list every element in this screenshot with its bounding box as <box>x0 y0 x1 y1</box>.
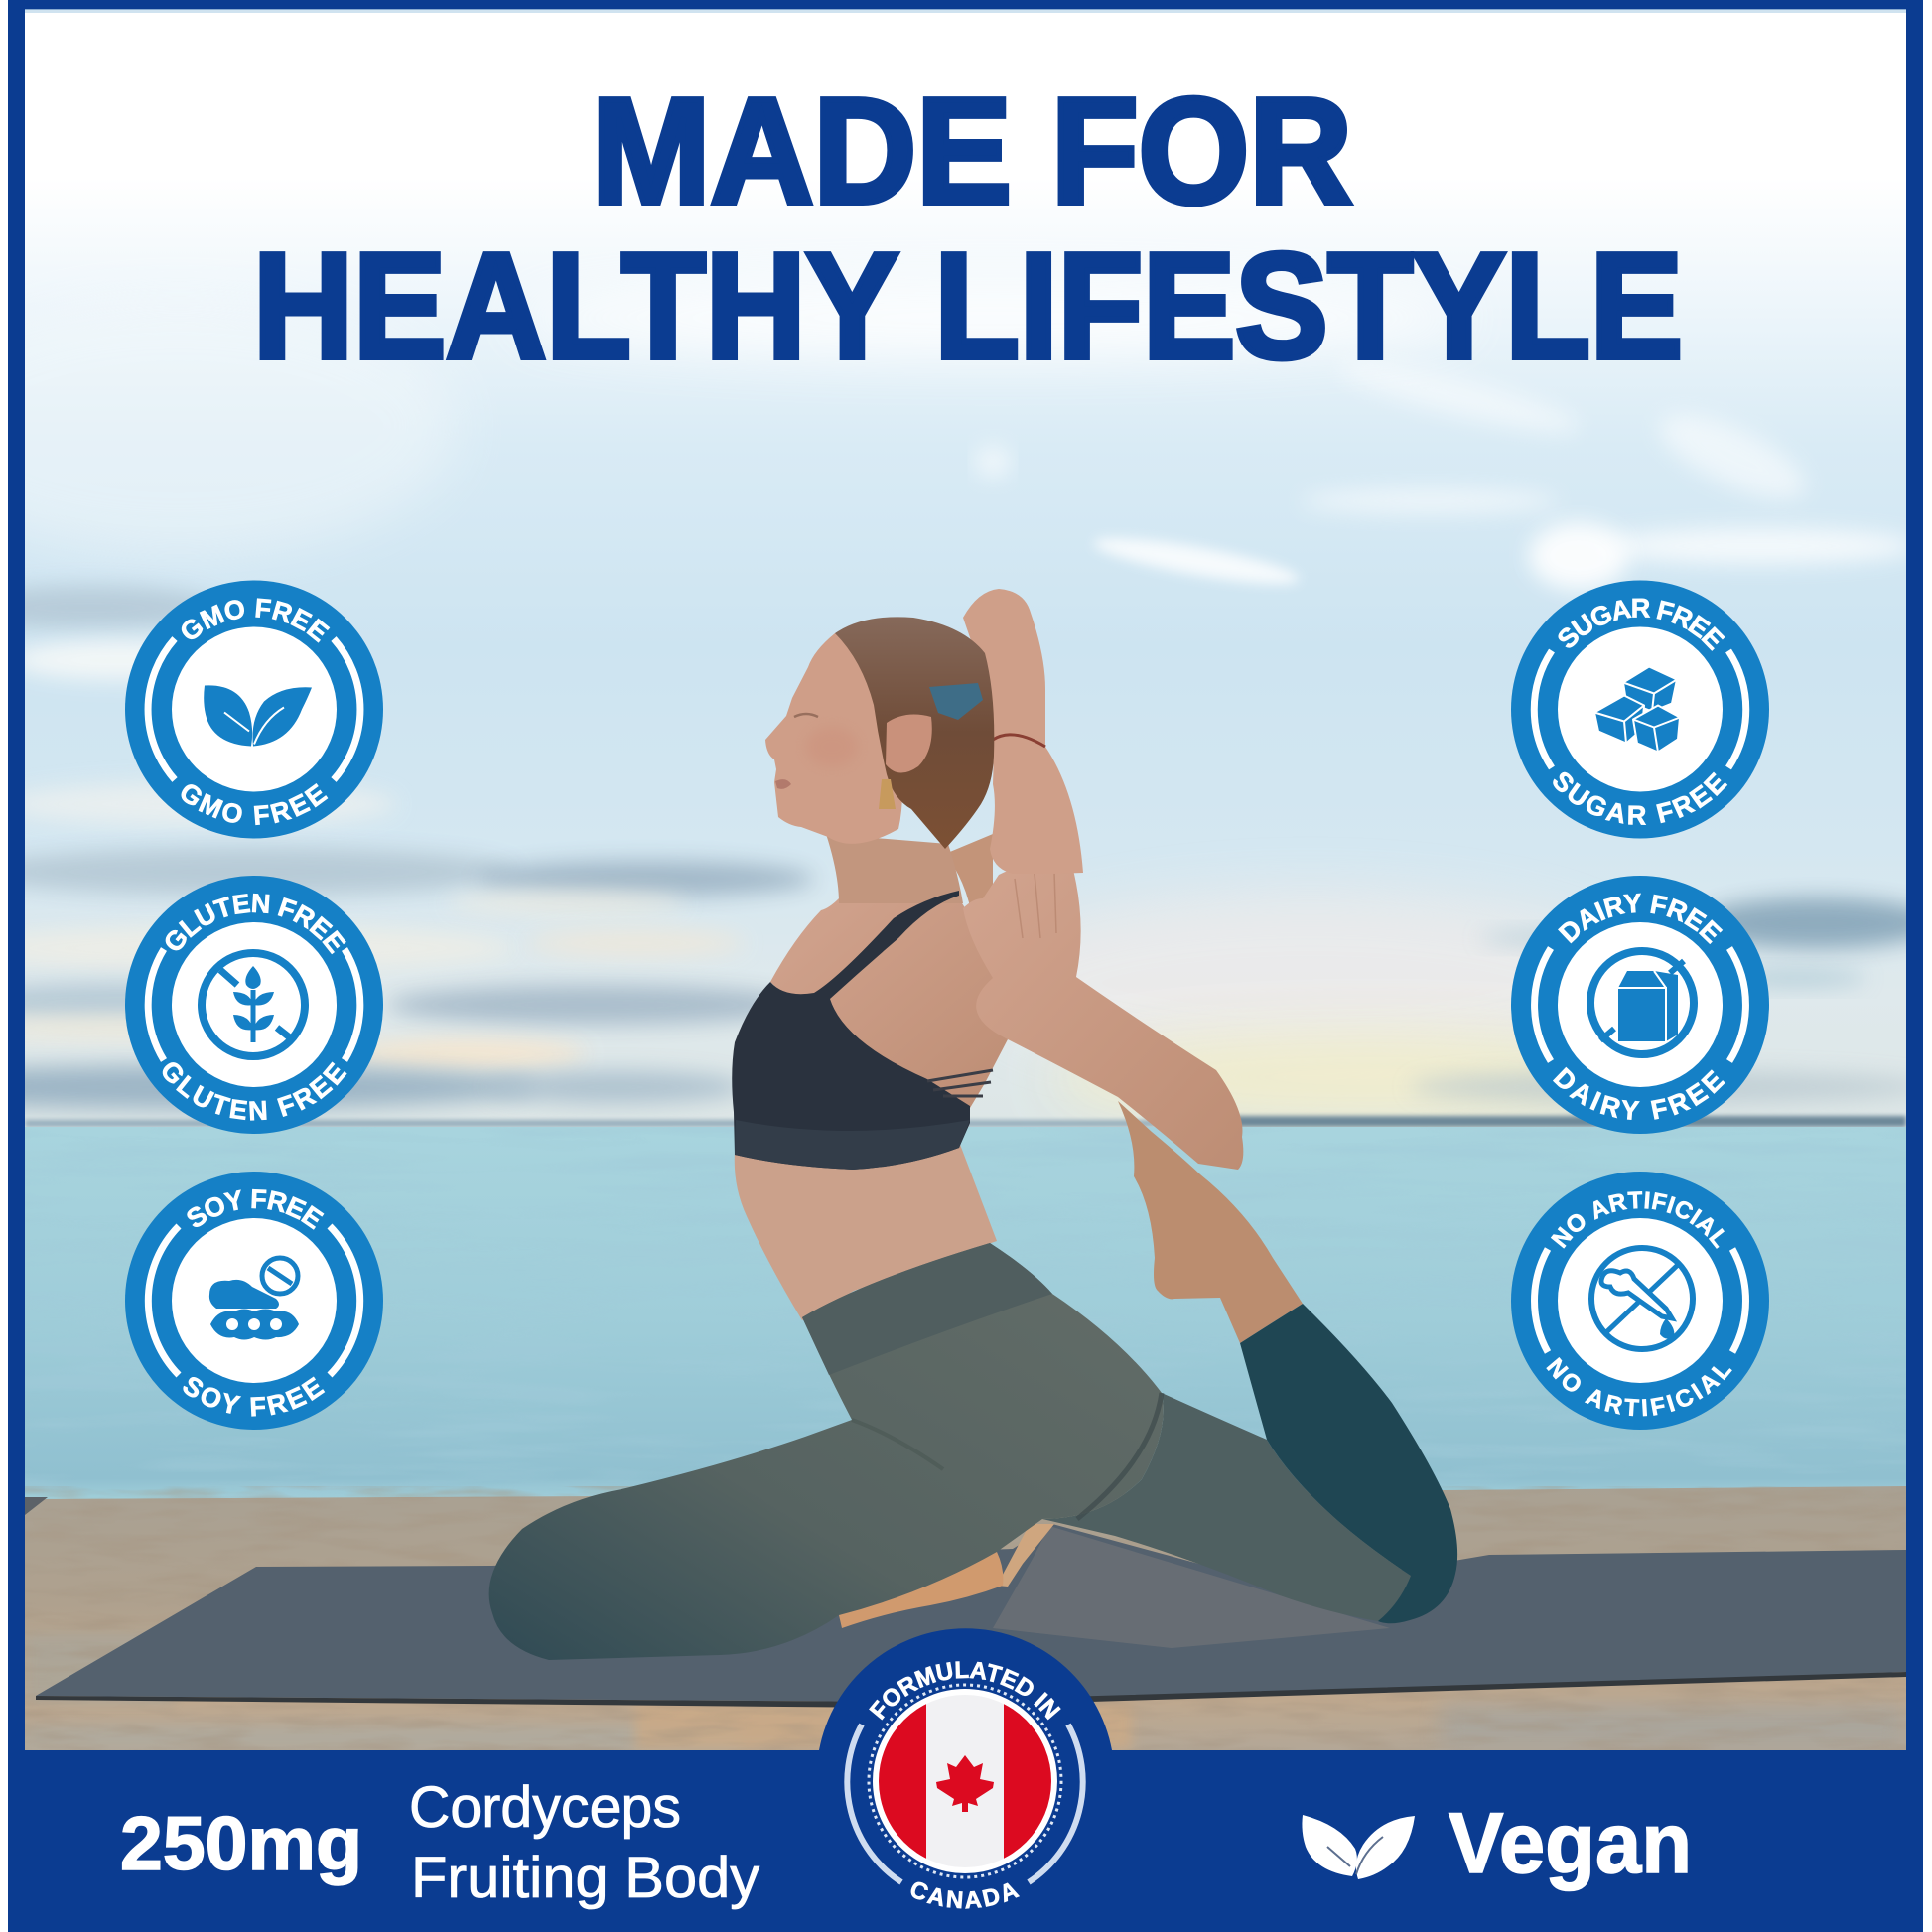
badge: no artificial: NO ARTIFICIAL <box>1546 1357 1732 1416</box>
badge: soy free: SOY FREE <box>183 1376 326 1417</box>
badge: dairy free: DAIRY FREE <box>1558 894 1724 945</box>
yoga mat <box>36 1524 1906 1702</box>
hair clip <box>929 683 983 720</box>
icon: Canadian flag <box>874 1688 1056 1876</box>
text: Cordyceps Fruiting Body: Cordyceps <box>409 1775 681 1840</box>
badge: sugar free: SUGAR FREE <box>1558 598 1725 651</box>
front foot <box>839 1552 1003 1628</box>
text: Cordyceps Fruiting Body <box>409 1775 759 1910</box>
text: Cordyceps Fruiting Body: Fruiting Body <box>411 1846 759 1910</box>
badge: dairy free <box>1511 876 1769 1134</box>
rear arm behind head <box>951 834 993 903</box>
badge: soy free: SOY FREE <box>187 1189 324 1230</box>
badge: formulated in Canada: FORMULATED IN <box>869 1661 1061 1720</box>
sand between legs <box>997 1524 1054 1587</box>
neck <box>826 834 963 903</box>
thigh fold <box>852 1420 943 1469</box>
icon: vegan leaves <box>1302 1815 1415 1879</box>
icon: wheat crossed out <box>202 953 305 1056</box>
stone ground <box>25 1486 1906 1750</box>
badge: gluten free: GLUTEN FREE <box>165 894 346 955</box>
leggings dark calf <box>1240 1304 1457 1623</box>
leggings rear thigh <box>1042 1393 1411 1621</box>
badge: no artificial: NO ARTIFICIAL <box>1551 1191 1725 1249</box>
back foot leg <box>1118 1101 1303 1343</box>
badge: sugar free <box>1511 580 1769 838</box>
bra back strings <box>927 1070 993 1096</box>
sky <box>25 10 1906 1127</box>
badge: gluten free: GLUTEN FREE <box>163 1062 347 1121</box>
stat: 250mg: 250mg <box>120 1802 362 1886</box>
ear <box>886 715 932 773</box>
icon: leaves <box>204 685 312 747</box>
icon: sugar cubes <box>1594 667 1680 753</box>
top edge band <box>25 9 1906 13</box>
badge: gluten free <box>125 876 383 1134</box>
text: Vegan: Vegan <box>1449 1796 1692 1891</box>
torso <box>735 1142 997 1320</box>
bracelet <box>993 735 1045 747</box>
icon: dropper crossed out <box>1591 1248 1693 1349</box>
title: MADE FOR <box>592 67 1352 234</box>
badge: formulated in Canada <box>819 1628 1112 1914</box>
leggings front thigh and hip <box>489 1243 1164 1660</box>
title <box>253 67 1683 389</box>
raised arm <box>963 589 1083 874</box>
back and chest skin <box>770 898 1008 1108</box>
badge: GMO free <box>125 580 383 838</box>
waistband shade <box>802 1243 1052 1375</box>
badge: GMO free: GMO FREE <box>181 783 328 826</box>
woman figure <box>489 589 1457 1660</box>
icon: soybean pods <box>209 1258 299 1340</box>
bra band <box>735 1120 970 1170</box>
bottom bar <box>9 1750 1923 1932</box>
face <box>765 633 902 844</box>
badge: sugar free: SUGAR FREE <box>1553 772 1727 825</box>
forearm and raised hand <box>963 865 1243 1170</box>
title: HEALTHY LIFESTYLE <box>253 221 1683 389</box>
badge: GMO free: GMO FREE <box>181 598 330 643</box>
hair <box>835 617 994 849</box>
facial features <box>775 713 818 789</box>
icon: milk carton crossed out <box>1590 951 1694 1054</box>
badge: formulated in Canada: CANADA <box>911 1882 1020 1909</box>
badge: dairy free: DAIRY FREE <box>1553 1066 1725 1120</box>
badge: no artificial <box>1511 1172 1769 1430</box>
sports bra <box>732 891 970 1170</box>
badge: soy free <box>125 1172 383 1430</box>
finger lines <box>1015 872 1056 938</box>
sea <box>25 1127 1906 1509</box>
horizon <box>25 1120 1216 1127</box>
